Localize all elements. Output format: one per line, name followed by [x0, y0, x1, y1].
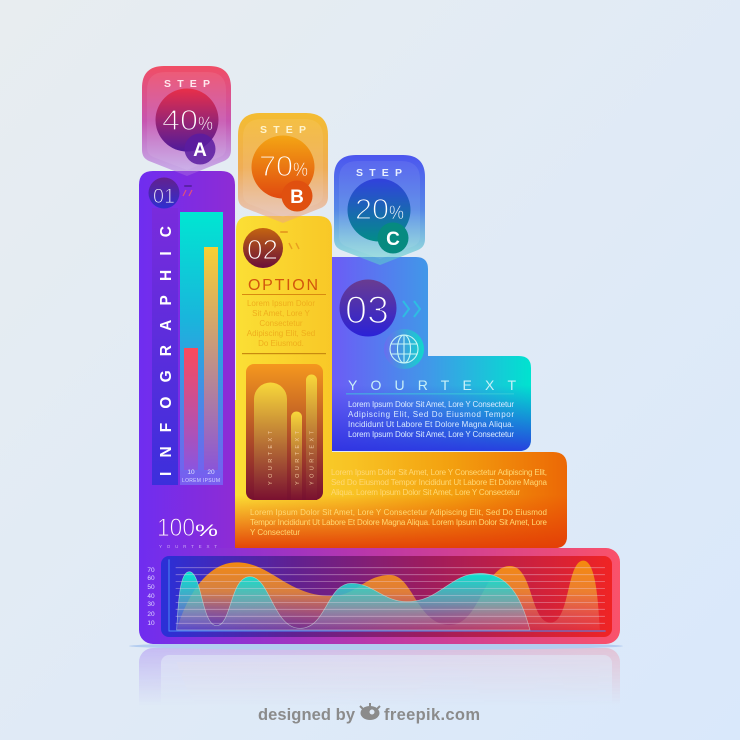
text block: blue body: Adipiscing Elit, Sed Do Eiusmod Tempor [348, 410, 514, 419]
text block: blue body: Lorem Ipsum Dolor Sit Amet, Lore Y Consectetur [348, 430, 514, 439]
value: 20 [355, 194, 389, 226]
badge: 01: 01 [153, 185, 175, 208]
axis labels: 10 [147, 620, 155, 627]
step badge A [142, 66, 231, 176]
badge: 02 [243, 228, 299, 268]
value [355, 194, 404, 226]
text block: blue body: Incididunt Ut Labore Et Dolore Magna Aliqua. [348, 420, 514, 429]
badge shape [238, 113, 328, 223]
pill chart card: YOURTEXT [310, 430, 316, 485]
bar chart: LOREM IPSUM [182, 478, 220, 484]
pill chart card: YOURTEXT [295, 430, 301, 485]
panel: blue your text [332, 257, 531, 451]
watermark: freepik.com [384, 706, 480, 724]
text block: option body: Do Eiusmod. [258, 339, 304, 348]
text block: option body: Lorem Ipsum Dolor [247, 299, 315, 308]
text block: blue body [348, 400, 514, 439]
value: 40 [162, 105, 198, 137]
column background [139, 171, 235, 600]
panel: purple infographic column [139, 171, 235, 600]
axis labels: 50 [147, 584, 155, 591]
text block: orange lower: Y Consectetur [250, 528, 300, 537]
step label: STEP [356, 167, 402, 179]
text block: orange lower: Tempor Incididunt Ut Labore Et Dolore Magna Aliqua. Lorem Ipsum Dolor Sit Amet, Lore [250, 518, 548, 527]
band background [139, 548, 620, 644]
step label: STEP [164, 78, 210, 90]
pill chart card: YOURTEXT [268, 430, 274, 485]
letter: A [193, 140, 207, 161]
axis labels: 70 [147, 567, 155, 574]
badge shape [142, 66, 231, 176]
vertical title: INFOGRAPHIC [158, 226, 175, 476]
value: 70 [259, 151, 293, 183]
caption: your text: YOURTEXT [159, 544, 217, 549]
area chart [169, 559, 606, 631]
value [162, 105, 213, 137]
icon: freepik logo [360, 703, 380, 720]
floor shadow [129, 642, 623, 650]
bar chart: 10 [187, 469, 195, 476]
chart panel [161, 556, 612, 637]
heading: your text: YOURTEXT [348, 377, 516, 393]
axis labels [147, 567, 155, 627]
heading: option: OPTION [248, 277, 318, 294]
circle [252, 136, 314, 198]
watermark: designed by [258, 706, 356, 724]
chevrons [403, 301, 420, 317]
text block: orange upper: Lorem Ipsum Dolor Sit Amet, Lore Y Consectetur Adipiscing Elit, [331, 468, 547, 477]
text block: option body: Sit Amet, Lore Y [252, 309, 310, 318]
axis labels: 20 [147, 611, 155, 618]
badge: 03 [340, 280, 396, 336]
text block: option body: Adipiscing Elit, Sed [247, 329, 315, 338]
value: % [293, 160, 308, 181]
text block: orange upper: Sed Do Eiusmod Tempor Incididunt Ut Labore Et Dolore Magna [331, 478, 548, 487]
stat: 100%: 100 [157, 514, 195, 542]
icon: globe [384, 329, 424, 369]
panel background [235, 216, 567, 548]
text block: orange upper [331, 468, 548, 497]
text block: orange lower: Lorem Ipsum Dolor Sit Amet, Lore Y Consectetur Adipiscing Elit, Sed Do Eiusmod [250, 508, 547, 517]
badge: 02: 02 [247, 234, 278, 265]
pill chart card [246, 364, 323, 500]
axis labels: 60 [147, 575, 155, 582]
panel: bottom chart band [139, 548, 620, 644]
text block: orange upper: Aliqua. Lorem Ipsum Dolor Sit Amet, Lore Y Consectetur [331, 488, 520, 497]
panel background [332, 257, 531, 451]
value: % [389, 203, 404, 224]
floor reflection [139, 648, 620, 696]
vertical title strip [152, 208, 178, 485]
axis labels: 40 [147, 593, 155, 600]
letter: C [386, 229, 400, 250]
value [259, 151, 308, 183]
letter: B [290, 187, 304, 208]
badge: 03: 03 [345, 289, 389, 332]
step label: STEP [260, 124, 306, 136]
bar chart [180, 212, 223, 485]
bar chart: 20 [207, 469, 215, 476]
badge: 01 [148, 178, 192, 208]
stat: 100% [157, 514, 218, 542]
panel: option yellow and orange [235, 216, 567, 548]
value: % [198, 114, 213, 135]
badge shape [334, 155, 425, 265]
text block: blue body: Lorem Ipsum Dolor Sit Amet, Lore Y Consectetur [348, 400, 514, 409]
axis labels: 30 [147, 601, 155, 608]
stat: 100%: % [195, 521, 218, 540]
step badge B [238, 113, 328, 223]
text block: option body: Consectetur [259, 319, 303, 328]
text block: orange lower [250, 508, 548, 537]
watermark [258, 703, 480, 724]
text block: option body [247, 299, 315, 348]
circle [348, 178, 410, 242]
circle [156, 88, 218, 152]
step badge C [334, 155, 425, 265]
